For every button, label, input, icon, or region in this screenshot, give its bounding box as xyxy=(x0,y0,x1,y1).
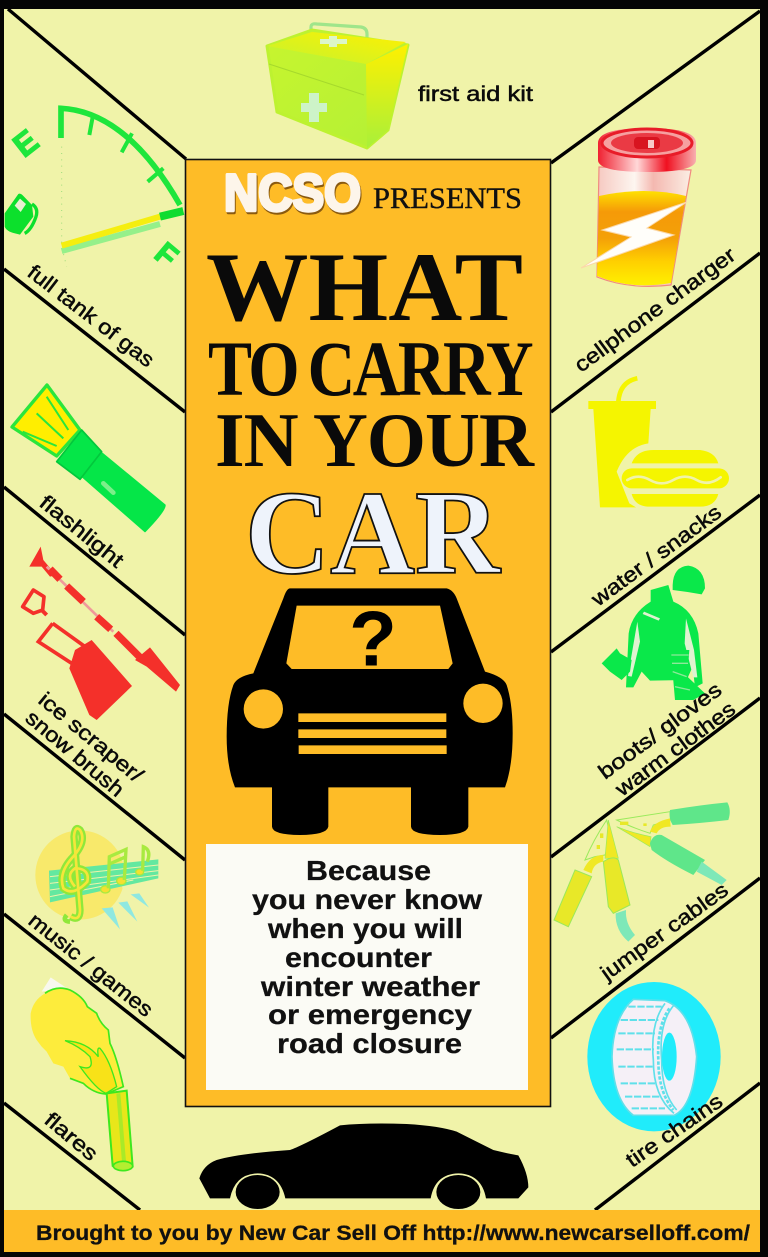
message box: encounter xyxy=(285,942,432,973)
footer credit text: Brought to you by New Car Sell Off http://www.newcarselloff.com/ xyxy=(36,1221,750,1245)
footer bar xyxy=(4,1210,760,1252)
icon: water and hot dog xyxy=(588,378,729,507)
icon: front view car with question mark xyxy=(227,588,513,835)
message box: you never know xyxy=(252,884,483,915)
label: water / snacks: water / snacks xyxy=(586,501,726,612)
icon: jumper cables xyxy=(554,802,730,942)
label: ice scraper: ice scraper/ xyxy=(34,688,147,787)
icon: side view car xyxy=(199,1124,528,1209)
label: jumper cables: jumper cables xyxy=(596,878,733,986)
label: snow brush: snow brush xyxy=(21,706,128,802)
icon: fuel gauge xyxy=(5,108,184,274)
icon: ice scraper and snow brush xyxy=(23,547,180,720)
title: to carry: TO CARRY xyxy=(208,325,532,412)
label: first aid kit: first aid kit xyxy=(418,83,533,106)
icon: battery xyxy=(581,128,696,286)
icon: first aid kit xyxy=(267,24,408,148)
icon: tire chains xyxy=(587,982,721,1131)
label: full tank of gas: full tank of gas xyxy=(23,261,158,372)
icon: front view car with question mark: ? xyxy=(349,595,397,683)
icon: music notes xyxy=(35,828,160,929)
presents: PRESENTS xyxy=(373,182,522,215)
label: flashlight: flashlight xyxy=(35,491,128,573)
label: tire chains: tire chains xyxy=(622,1090,727,1172)
label: flares: flares xyxy=(40,1108,102,1166)
title: in your: IN YOUR xyxy=(215,397,535,483)
title: car: CAR xyxy=(245,466,501,599)
label: cellphone charger: cellphone charger xyxy=(570,243,740,377)
message box: when you will xyxy=(267,913,463,944)
label: warm clothes: warm clothes xyxy=(610,697,740,802)
message box: Because xyxy=(306,855,431,886)
label: music / games: music / games xyxy=(24,909,157,1022)
message box: road closure xyxy=(277,1028,462,1059)
icon: fuel gauge: E xyxy=(6,122,45,164)
title: what: WHAT xyxy=(206,233,523,342)
icon: flare xyxy=(31,977,133,1171)
label: boots gloves: boots/ gloves xyxy=(594,678,726,784)
message box xyxy=(206,844,528,1090)
NCSO logo: NCSO xyxy=(224,164,361,222)
central panel xyxy=(186,160,550,1106)
NCSO logo: NCSO xyxy=(225,166,362,224)
icon: flashlight xyxy=(12,385,165,532)
message box: or emergency xyxy=(268,999,473,1030)
icon: fuel gauge: F xyxy=(148,236,184,274)
message box: winter weather xyxy=(260,971,480,1002)
icon: jacket, hat, gloves and socks xyxy=(602,566,705,700)
